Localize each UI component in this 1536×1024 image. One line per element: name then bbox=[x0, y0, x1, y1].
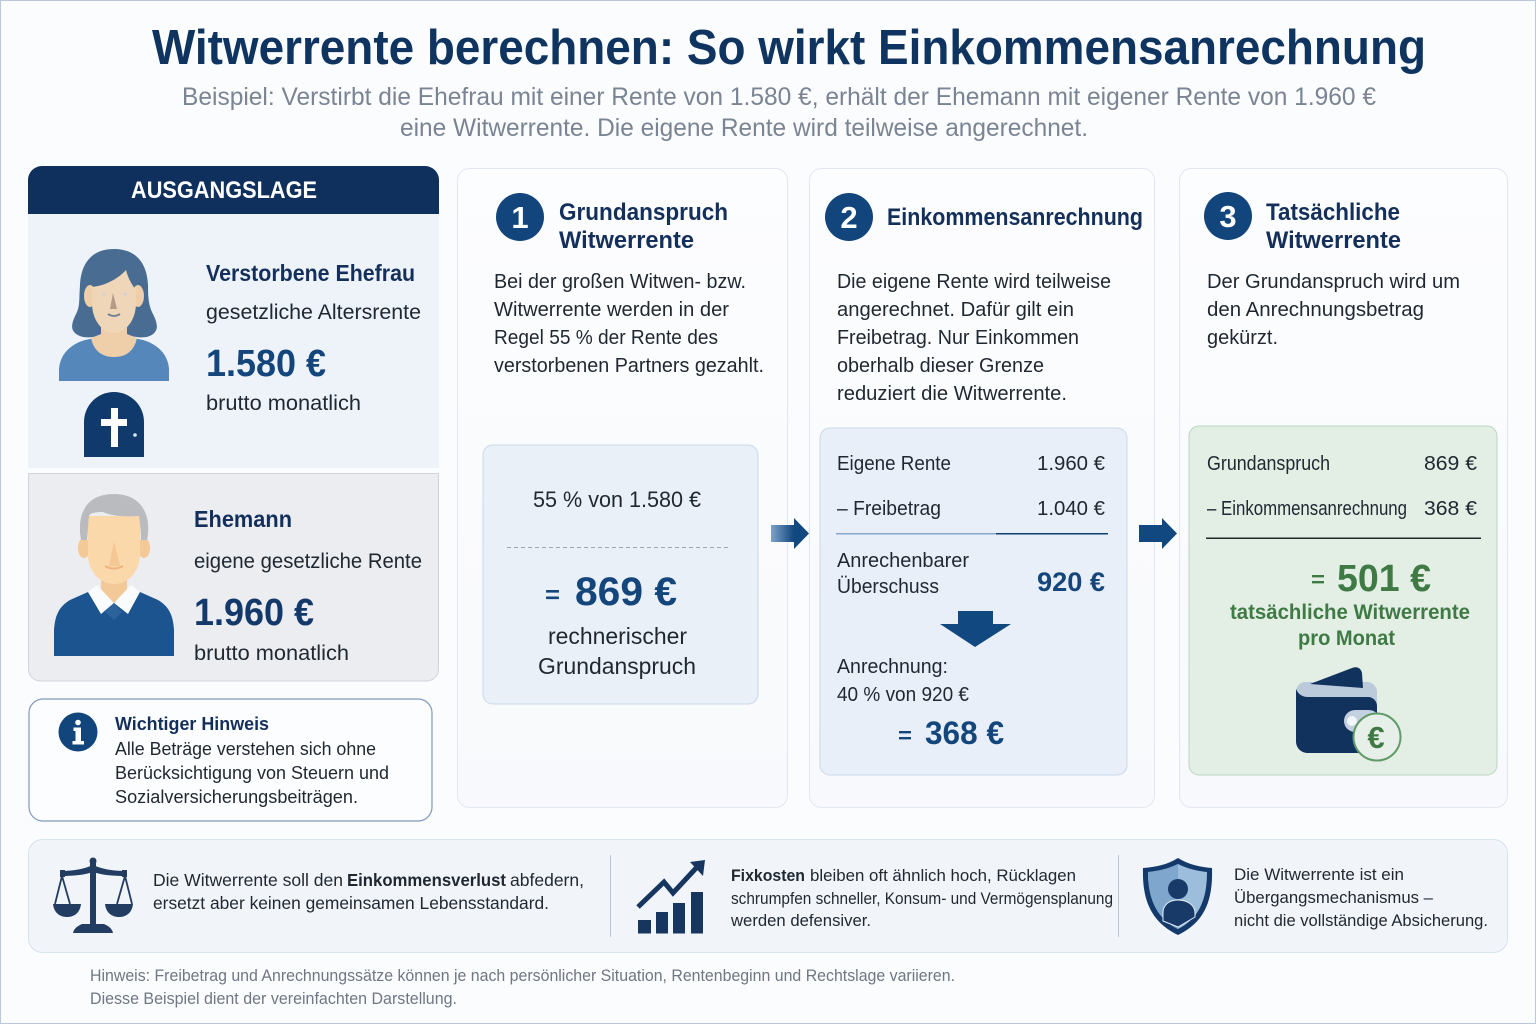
text: Einkommensverlust: abfedern, bbox=[510, 870, 584, 890]
text: explanation step 2: Freibetrag. Nur Einkommen bbox=[837, 326, 1079, 349]
icon: gravestone bbox=[84, 392, 144, 457]
hint text bbox=[115, 713, 389, 807]
result box: 501 €: = bbox=[1311, 567, 1325, 592]
text: Einkommensverlust: Die Witwerrente soll den bbox=[153, 870, 343, 890]
text: Ehemann: eigene gesetzliche Rente bbox=[194, 549, 422, 573]
calculation box: Grundanspruch: 55 % von 1.580 € bbox=[533, 487, 701, 512]
text: Übergangsmechanismus: Übergangsmechanismus – bbox=[1234, 889, 1434, 907]
icon: scales bbox=[53, 858, 133, 933]
text: Übergangsmechanismus: nicht die vollständige Absicherung. bbox=[1234, 912, 1488, 930]
calculation box: Anrechnung: 368 € bbox=[925, 715, 1004, 751]
step number 1: 1 bbox=[511, 200, 529, 235]
text: explanation step 1: Bei der großen Witwen- bzw. bbox=[494, 270, 746, 293]
arrow: step 2 to 3 bbox=[1139, 518, 1177, 549]
text: Fixkosten: bleiben oft ähnlich hoch, Rücklagen bbox=[810, 867, 1076, 885]
text: Ehefrau bbox=[206, 260, 421, 415]
result box: 501 €: tatsächliche Witwerrente bbox=[1230, 601, 1470, 624]
calculation box: Anrechnung: 1.960 € bbox=[1037, 452, 1106, 475]
text: explanation step 1 bbox=[494, 270, 764, 377]
text: explanation step 3: Der Grundanspruch wird um bbox=[1207, 270, 1460, 293]
text: Fixkosten bbox=[730, 867, 1113, 930]
calculation box: Anrechnung: – Freibetrag bbox=[837, 497, 941, 520]
result box: 501 €: Grundanspruch bbox=[1207, 453, 1330, 475]
text: Ehemann: 1.960 € bbox=[194, 592, 314, 634]
heading: Grundanspruch Witwerrente: Grundanspruch bbox=[559, 199, 728, 226]
step number 2 bbox=[825, 193, 873, 241]
arrow: step 1 to 2 bbox=[771, 518, 809, 549]
step number 3 bbox=[1204, 192, 1252, 240]
heading: Tatsächliche Witwerrente bbox=[1266, 199, 1401, 254]
calculation box: Grundanspruch: = bbox=[545, 582, 560, 609]
footnote: Hinweis: Freibetrag und Anrechnungssätze können je nach persönlicher Situation, Rentenbeginn und Rechtslage variieren. bbox=[90, 967, 955, 985]
panel: step 2 bbox=[810, 168, 1154, 808]
icon: wallet with euro bbox=[1296, 667, 1400, 760]
calculation box: Anrechnung: 920 € bbox=[1037, 567, 1105, 597]
text: Einkommensverlust: ersetzt aber keinen gemeinsamen Lebensstandard. bbox=[153, 893, 549, 913]
text: explanation step 1: Witwerrente werden in der bbox=[494, 298, 729, 321]
text: Ehefrau: gesetzliche Altersrente bbox=[206, 300, 421, 324]
text: Übergangsmechanismus bbox=[1234, 866, 1488, 930]
text: Fixkosten: schrumpfen schneller, Konsum- und Vermögensplanung bbox=[731, 890, 1113, 908]
hint text: Sozialversicherungsbeiträgen. bbox=[115, 786, 358, 807]
panel: step 1 bbox=[458, 168, 788, 808]
icon: shield with person bbox=[1143, 858, 1212, 935]
text: Ehemann bbox=[194, 506, 422, 665]
arrow: down bbox=[940, 611, 1011, 647]
panel: key takeaways bbox=[28, 840, 1508, 952]
subtitle bbox=[182, 83, 1376, 142]
title: Witwerrente berechnen: So wirkt Einkommensanrechnung bbox=[152, 21, 1426, 75]
icon: info bbox=[58, 712, 98, 752]
result box: 501 €: 368 € bbox=[1424, 497, 1478, 520]
calculation box: Anrechnung: Eigene Rente bbox=[837, 452, 951, 475]
icon: wallet with euro: € bbox=[1367, 720, 1385, 755]
heading: Grundanspruch Witwerrente: Witwerrente bbox=[559, 227, 694, 254]
text: explanation step 2: angerechnet. Dafür gilt ein bbox=[837, 298, 1074, 321]
text: Ehemann: brutto monatlich bbox=[194, 641, 349, 665]
result box: 501 € bbox=[1189, 426, 1497, 775]
footnote: Diesse Beispiel dient der vereinfachten Darstellung. bbox=[90, 990, 457, 1008]
text: explanation step 3: den Anrechnungsbetrag bbox=[1207, 298, 1424, 321]
calculation box: Grundanspruch: rechnerischer bbox=[548, 623, 687, 649]
step number 1 bbox=[496, 193, 544, 241]
callout: Wichtiger Hinweis bbox=[29, 699, 432, 821]
sub-panel: Ehemann bbox=[28, 474, 438, 681]
calculation box: Anrechnung: Überschuss bbox=[837, 575, 939, 598]
text: Ehefrau: brutto monatlich bbox=[206, 391, 361, 415]
text: explanation step 2: Die eigene Rente wird teilweise bbox=[837, 270, 1111, 293]
calculation box: Grundanspruch bbox=[483, 445, 758, 704]
calculation box: Anrechnung: 40 % von 920 € bbox=[837, 683, 970, 706]
text: Fixkosten: Fixkosten bbox=[731, 867, 805, 885]
panel: step 3 bbox=[1180, 168, 1508, 808]
icon: man bbox=[54, 494, 174, 656]
calculation box: Anrechnung: Anrechenbarer bbox=[837, 549, 969, 572]
panel header: AUSGANGSLAGE bbox=[131, 177, 317, 204]
text: explanation step 1: Regel 55 % der Rente des bbox=[494, 326, 718, 349]
heading: Tatsächliche Witwerrente: Witwerrente bbox=[1266, 227, 1401, 254]
sub-panel: Verstorbene Ehefrau bbox=[28, 214, 439, 468]
heading: Grundanspruch Witwerrente bbox=[559, 199, 728, 254]
text: Ehefrau: 1.580 € bbox=[206, 343, 326, 385]
calculation box: Anrechnung: = bbox=[898, 723, 912, 748]
step number 3: 3 bbox=[1219, 199, 1237, 234]
text: Fixkosten: werden defensiver. bbox=[730, 912, 871, 930]
calculation box: Anrechnung: 1.040 € bbox=[1037, 497, 1106, 520]
hint text: Berücksichtigung von Steuern und bbox=[115, 762, 389, 783]
result box: 501 €: – Einkommensanrechnung bbox=[1207, 498, 1407, 520]
hint text: Alle Beträge verstehen sich ohne bbox=[115, 738, 376, 759]
result box: 501 €: 501 € bbox=[1337, 558, 1431, 600]
text: Ehefrau: Verstorbene Ehefrau bbox=[206, 260, 415, 286]
text: explanation step 2: reduziert die Witwerrente. bbox=[837, 382, 1067, 405]
text: explanation step 1: verstorbenen Partners gezahlt. bbox=[494, 354, 764, 377]
text: Übergangsmechanismus: Die Witwerrente ist ein bbox=[1234, 866, 1404, 884]
text: explanation step 2 bbox=[837, 270, 1111, 405]
calculation box: Grundanspruch: 869 € bbox=[575, 570, 677, 614]
footnote bbox=[90, 967, 955, 1008]
subtitle: Beispiel: Verstirbt die Ehefrau mit einer Rente von 1.580 €, erhält der Ehemann mit eigener Rente von 1.960 € bbox=[182, 83, 1376, 111]
calculation box: Anrechnung: Anrechnung: bbox=[837, 655, 948, 678]
text: Ehemann: Ehemann bbox=[194, 506, 292, 532]
icon: woman bbox=[59, 249, 169, 381]
panel: Ausgangslage bbox=[28, 166, 439, 681]
text: explanation step 2: oberhalb dieser Grenze bbox=[837, 354, 1044, 377]
result box: 501 €: 869 € bbox=[1424, 452, 1478, 475]
calculation box: Anrechnung bbox=[820, 428, 1127, 775]
text: explanation step 3: gekürzt. bbox=[1207, 326, 1278, 349]
icon: rising chart bbox=[638, 860, 705, 934]
text: explanation step 3 bbox=[1207, 270, 1460, 349]
panel header bbox=[28, 166, 439, 214]
result box: 501 €: pro Monat bbox=[1298, 627, 1395, 650]
hint text: Wichtiger Hinweis bbox=[115, 713, 269, 734]
calculation box: Grundanspruch: Grundanspruch bbox=[538, 653, 696, 679]
heading: Tatsächliche Witwerrente: Tatsächliche bbox=[1266, 199, 1400, 226]
step number 2: 2 bbox=[840, 200, 858, 235]
heading: Einkommensanrechnung: Einkommensanrechnung bbox=[887, 204, 1143, 231]
text: Einkommensverlust: Einkommensverlust bbox=[347, 870, 506, 890]
text: Einkommensverlust bbox=[153, 870, 584, 913]
subtitle: eine Witwerrente. Die eigene Rente wird teilweise angerechnet. bbox=[400, 114, 1088, 142]
